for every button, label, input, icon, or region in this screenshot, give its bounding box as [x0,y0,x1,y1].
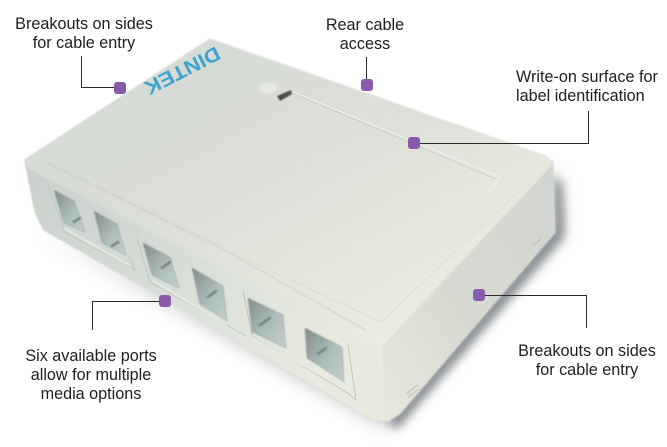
port lower lips [64,228,344,387]
label: top-left breakouts [15,15,153,52]
label: rear cable access: Rear cable [326,16,404,34]
label: right breakouts: Breakouts on sides [518,342,656,360]
label: top-left breakouts: Breakouts on sides [15,15,153,33]
label: write-on surface: Write-on surface for [516,68,658,86]
label: rear cable access: access [340,35,390,53]
DINTEK logo: DINTEK [140,42,224,99]
port contacts [74,218,326,354]
label: six ports [25,347,157,403]
box top face [26,40,552,345]
shadow [42,170,564,428]
label: six ports: Six available ports [25,347,157,365]
leader: write-on surface [408,111,589,149]
port frames [48,185,356,400]
side breakout marks [407,239,541,397]
label: write-on surface: label identification [516,87,645,105]
write-on label surface [247,90,515,322]
label: six ports: allow for multiple [31,366,151,384]
box front face [26,162,383,419]
leader: right breakouts [473,289,587,328]
rear cable slot [259,83,292,101]
box right side face [376,162,554,420]
label: write-on surface [516,68,658,105]
label: rear cable access [326,16,404,53]
leader: rear cable access [361,57,373,91]
top bevel lines [48,163,365,330]
six ports [54,190,344,382]
label: six ports: media options [41,385,141,403]
label: right breakouts [518,342,656,379]
leader: six ports [92,295,171,330]
label: top-left breakouts: for cable entry [33,34,135,52]
label: right breakouts: for cable entry [536,361,638,379]
leader: top-left breakouts [81,56,126,94]
